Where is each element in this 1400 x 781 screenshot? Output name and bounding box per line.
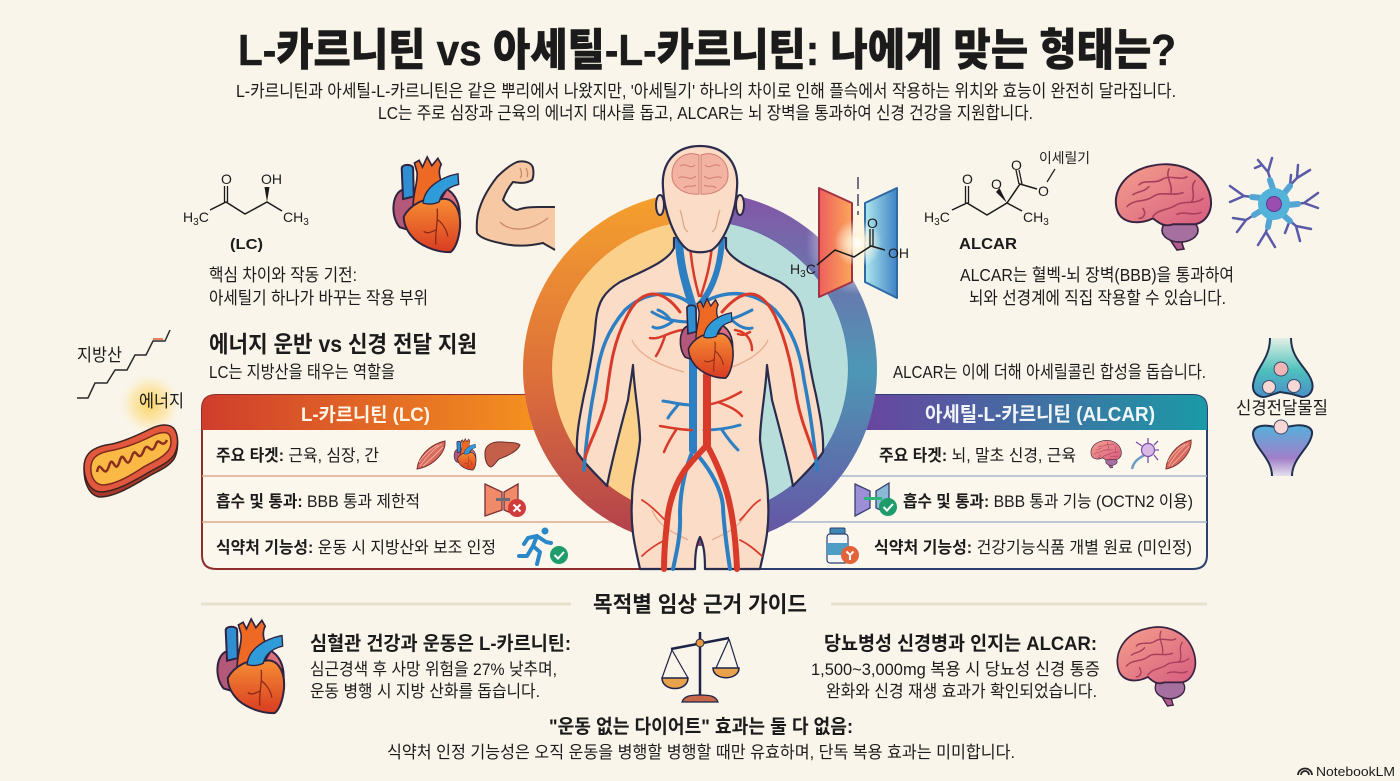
label: fatty acid: 지방산: [77, 345, 122, 365]
row: main targets LC: 주요 타겟: 근육, 심장, 간: [216, 446, 379, 465]
row: absorption LC: 흡수 및 통과: BBB 통과 제한적: [216, 492, 420, 511]
ALCAR table header: 아세틸-L-카르니틴 (ALCAR): [925, 403, 1155, 426]
subtitle: [236, 81, 1176, 123]
molecule: LC: C: [199, 209, 209, 225]
heading: guide: 목적별 임상 근거 가이드: [593, 592, 807, 617]
label: LC: (LC): [230, 236, 263, 253]
LC table header: L-카르니틴 (LC): [301, 404, 430, 426]
icon: bottom heart: [217, 619, 284, 713]
icon: blocked barrier: [485, 484, 526, 517]
molecule: LC: [183, 171, 309, 228]
row: absorption ALCAR: 흡수 및 통과: BBB 통과 기능 (OCTN2 이용): [903, 492, 1193, 511]
molecule: LC: OH: [261, 171, 282, 187]
LC table header: [202, 395, 560, 430]
molecule: ALCAR: [924, 150, 1090, 228]
row: regulator LC: 식약처 기능성: 운동 시 지방산와 보조 인정: [216, 538, 496, 557]
icon: heart small: [454, 439, 476, 470]
label: ALCAR: ALCAR: [959, 236, 1017, 253]
text: neuropathy recommendation: 1,500~3,000mg 복용 시 당뇨성 신경 통증: [811, 660, 1100, 679]
text: core difference: 핵심 차이와 작동 기전:: [209, 265, 357, 285]
icon: balance scale: [662, 632, 739, 702]
central heart: [680, 299, 733, 378]
text: cardiovascular recommendation: 심혈관 건강과 운동은 L-카르니틴:: [310, 633, 571, 655]
icon: cell membrane with molecule passing: OH: [888, 245, 909, 261]
molecule: LC: 3: [303, 217, 309, 228]
icon: cell membrane with molecule passing: C: [806, 261, 816, 277]
label: neurotransmitter: 신경전달물질: [1236, 398, 1328, 418]
text: cardiovascular recommendation: [310, 633, 571, 701]
label: acetyl group: 이세릴기: [1039, 150, 1090, 166]
icon: flexed arm: [477, 161, 555, 250]
molecule: ALCAR: H: [924, 209, 934, 225]
molecule: LC: CH: [283, 209, 303, 225]
row: main targets ALCAR: 주요 타겟: 뇌, 말초 신경, 근육: [879, 446, 1076, 465]
molecule: LC: O: [221, 171, 232, 187]
head: [656, 146, 744, 252]
molecule: ALCAR: O: [1038, 183, 1049, 199]
molecule: ALCAR: O: [962, 171, 973, 187]
subtitle: L-카르니틴과 아세틸-L-카르니틴은 같은 뿌리에서 나왔지만, '아세틸기' 하나의 차이로 인해 플슥에서 작용하는 위치와 효능이 완전히 달라집니다.: [236, 81, 1176, 101]
text: cardiovascular recommendation: 심근경색 후 사망 위험을 27% 낮추며,: [310, 660, 557, 679]
chest and abdomen contours: [632, 340, 768, 540]
text: neuropathy recommendation: 완화와 신경 재생 효과가 확인되었습니다.: [826, 682, 1097, 701]
icon: synapse: [1236, 338, 1328, 476]
icon: large brain: [1116, 164, 1211, 250]
icon: liver: [485, 442, 520, 467]
icon: neuron small: [1132, 438, 1159, 469]
icon: cell membrane with molecule passing: O: [867, 215, 878, 231]
icon: muscle: [417, 441, 445, 469]
icon: permeable barrier: [855, 483, 897, 516]
text: cardiovascular recommendation: 운동 병행 시 지방 산화를 돕습니다.: [310, 682, 540, 701]
ALCAR table header: [840, 395, 1207, 430]
icon: brain small: [1091, 440, 1121, 468]
section: clinical evidence guide: [201, 592, 1207, 762]
text: neuropathy recommendation: 당뇨병성 신경병과 인지는 ALCAR:: [824, 633, 1097, 655]
arteries: [585, 245, 815, 569]
panel: ALCAR comparison table: [706, 395, 1207, 569]
subtitle: LC는 주로 심장과 근육의 에너지 대사를 돕고, ALCAR는 뇌 장벽을 통과하여 신경 건강을 지원합니다.: [378, 103, 1033, 123]
energy glow label: 에너지: [139, 391, 184, 411]
text: ALCAR crosses BBB: 뇌와 선경계에 직집 작용할 수 있습니다.: [969, 288, 1226, 308]
icon: supplement bottle: [827, 528, 859, 564]
brain inside head: [672, 154, 728, 194]
icon: cell membrane with molecule passing: H: [790, 261, 800, 277]
text: no diet effect: [387, 716, 1015, 762]
icon: muscle small: [1166, 440, 1191, 469]
molecule: ALCAR: O: [1011, 157, 1022, 173]
human body with circulatory system: [577, 146, 823, 569]
icon: mitochondrion: [84, 425, 178, 497]
text: neuropathy recommendation: [811, 633, 1100, 701]
heading: energy vs neuro: 에너지 운반 vs 신경 전달 지원: [209, 331, 477, 357]
molecule: LC: 3: [193, 217, 199, 228]
molecule: ALCAR: 3: [934, 217, 940, 228]
panel: LC comparison table: [202, 395, 694, 569]
molecule: LC: H: [183, 209, 193, 225]
icon: fatty acid chain: [77, 330, 170, 398]
icon: runner with check: [519, 528, 568, 564]
text: ALCAR role: ALCAR는 이에 더해 아세릴콜린 합성을 돕습니다.: [893, 362, 1206, 382]
text: no diet effect: "운동 없는 다이어트" 효과는 둘 다 없음:: [549, 716, 853, 738]
body silhouette: [577, 238, 823, 569]
text: no diet effect: 식약처 인정 기능성은 오직 운동을 병행할 병행할 때만 유효하며, 단독 복용 효과는 미미합니다.: [387, 743, 1015, 762]
text: ALCAR crosses BBB: [960, 265, 1234, 308]
icon: cell membrane with molecule passing: [790, 177, 910, 298]
icon: neuron: [1230, 158, 1318, 247]
row: regulator ALCAR: 식약처 기능성: 건강기능식품 개별 원료 (미인정): [874, 538, 1192, 557]
icon: cell membrane with molecule passing: 3: [800, 269, 806, 280]
molecule: ALCAR: O: [991, 176, 1002, 192]
molecule: ALCAR: C: [940, 209, 950, 225]
watermark: NotebookLM: NotebookLM: [1316, 764, 1395, 779]
title: L-카르니틴 vs 아세틸-L-카르니틴: 나에게 맞는 형태는?: [238, 26, 1176, 75]
circular ring background: [523, 192, 877, 546]
text: LC role: LC는 지방산을 태우는 역할을: [209, 362, 395, 382]
text: ALCAR crosses BBB: ALCAR는 혈벡-뇌 장벽(BBB)을 통과하여: [960, 265, 1234, 285]
molecule: ALCAR: CH: [1023, 209, 1043, 225]
icon: large heart: [393, 157, 460, 252]
energy glow label: [120, 374, 184, 434]
text: core difference: [209, 265, 428, 308]
molecule: ALCAR: 3: [1043, 217, 1049, 228]
icon: bottom brain: [1117, 627, 1195, 706]
veins: [584, 240, 817, 569]
text: core difference: 아세틸기 하나가 바꾸는 작용 부위: [209, 288, 428, 308]
